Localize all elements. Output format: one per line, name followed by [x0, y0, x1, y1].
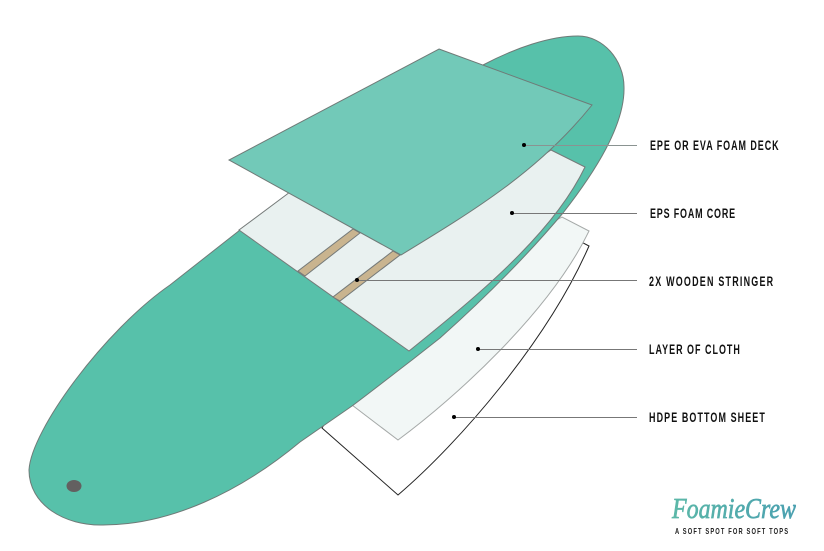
EPS foam core — [239, 150, 585, 351]
wooden stringer 1 — [298, 229, 360, 276]
callout: cloth — [476, 342, 740, 358]
logo: A SOFT SPOT FOR SOFT TOPS — [675, 528, 788, 536]
surfboard body — [29, 36, 624, 525]
bottom sheet layer — [322, 236, 589, 495]
cloth layer — [352, 217, 589, 440]
callout: core — [510, 206, 735, 222]
logo — [671, 493, 797, 536]
EPE or EVA foam deck — [229, 49, 592, 255]
callout: stringer: 2X WOODEN STRINGER — [649, 274, 774, 290]
callout: cloth: LAYER OF CLOTH — [649, 342, 740, 358]
tail hole — [66, 480, 82, 492]
callout: bottom sheet — [452, 410, 765, 426]
callout: bottom sheet: HDPE BOTTOM SHEET — [649, 410, 765, 426]
callout: deck: EPE OR EVA FOAM DECK — [650, 138, 779, 154]
wooden stringer 2 — [333, 251, 400, 301]
callout: stringer — [355, 274, 774, 290]
logo: FoamieCrew — [671, 493, 797, 525]
callout: deck — [522, 138, 779, 154]
callout: core: EPS FOAM CORE — [650, 206, 735, 222]
